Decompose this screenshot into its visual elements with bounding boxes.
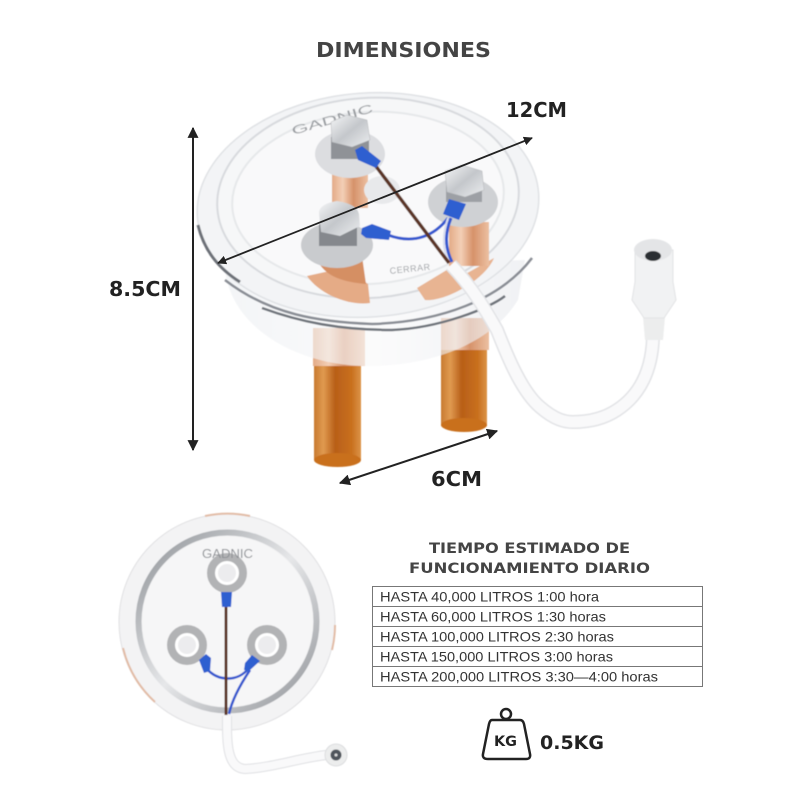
table: operating time: HASTA 60,000 LITROS 1:30 horas (380, 608, 606, 624)
bolt: back (315, 115, 385, 178)
blue wires (388, 218, 452, 262)
product photo: side view of electrode lid (190, 81, 676, 467)
center highlight (364, 176, 400, 204)
copper rod: left (313, 328, 365, 467)
bolt: right (428, 165, 498, 227)
label: 12CM: 12CM (506, 98, 567, 122)
table: operating time: HASTA 150,000 LITROS 3:00 horas (380, 648, 613, 664)
title: DIMENSIONES (316, 38, 491, 62)
metal ring (138, 532, 316, 710)
wires (206, 606, 250, 715)
arrow: 8.5 cm height (192, 128, 194, 450)
label: weight value: 0.5KG (540, 732, 604, 754)
table: operating time (372, 586, 703, 686)
table heading (409, 541, 650, 577)
arrow: 12 cm diameter (218, 138, 532, 263)
inner disc (142, 536, 312, 706)
logo: GADNIC (202, 546, 253, 561)
blue terminals (199, 592, 260, 673)
bolt: left (301, 201, 373, 268)
copper edge glints (123, 514, 335, 702)
transparent lower skirt (225, 260, 525, 366)
copper reflections (307, 172, 494, 303)
blue terminals (355, 146, 466, 240)
icon: weight (483, 709, 530, 759)
bolts (171, 557, 283, 661)
outer disc (119, 514, 335, 730)
table: operating time: HASTA 200,000 LITROS 3:30—4:00 horas (380, 668, 658, 684)
table: operating time: HASTA 100,000 LITROS 2:30 horas (380, 628, 614, 644)
small logo lettering: GADNIC (290, 101, 375, 138)
rim shadow lines (198, 225, 240, 282)
table: operating time: HASTA 40,000 LITROS 1:00 hora (380, 588, 599, 604)
outer rim (190, 81, 546, 329)
arrow: 6 cm spacing (340, 431, 497, 483)
product photo: top view of lid (119, 514, 347, 769)
white cable and connector (227, 716, 347, 769)
table heading: TIEMPO ESTIMADO DE (429, 541, 630, 557)
table heading: FUNCIONAMIENTO DIARIO (409, 561, 650, 577)
copper rod: right (441, 318, 489, 432)
label: 8.5CM: 8.5CM (109, 277, 181, 301)
brown wire (375, 165, 449, 263)
icon: weight: KG (494, 734, 517, 750)
white cable with connector (451, 239, 676, 422)
lid close marking: CERRAR (389, 262, 431, 276)
inner disc (210, 88, 526, 308)
label: 6CM: 6CM (431, 467, 482, 491)
